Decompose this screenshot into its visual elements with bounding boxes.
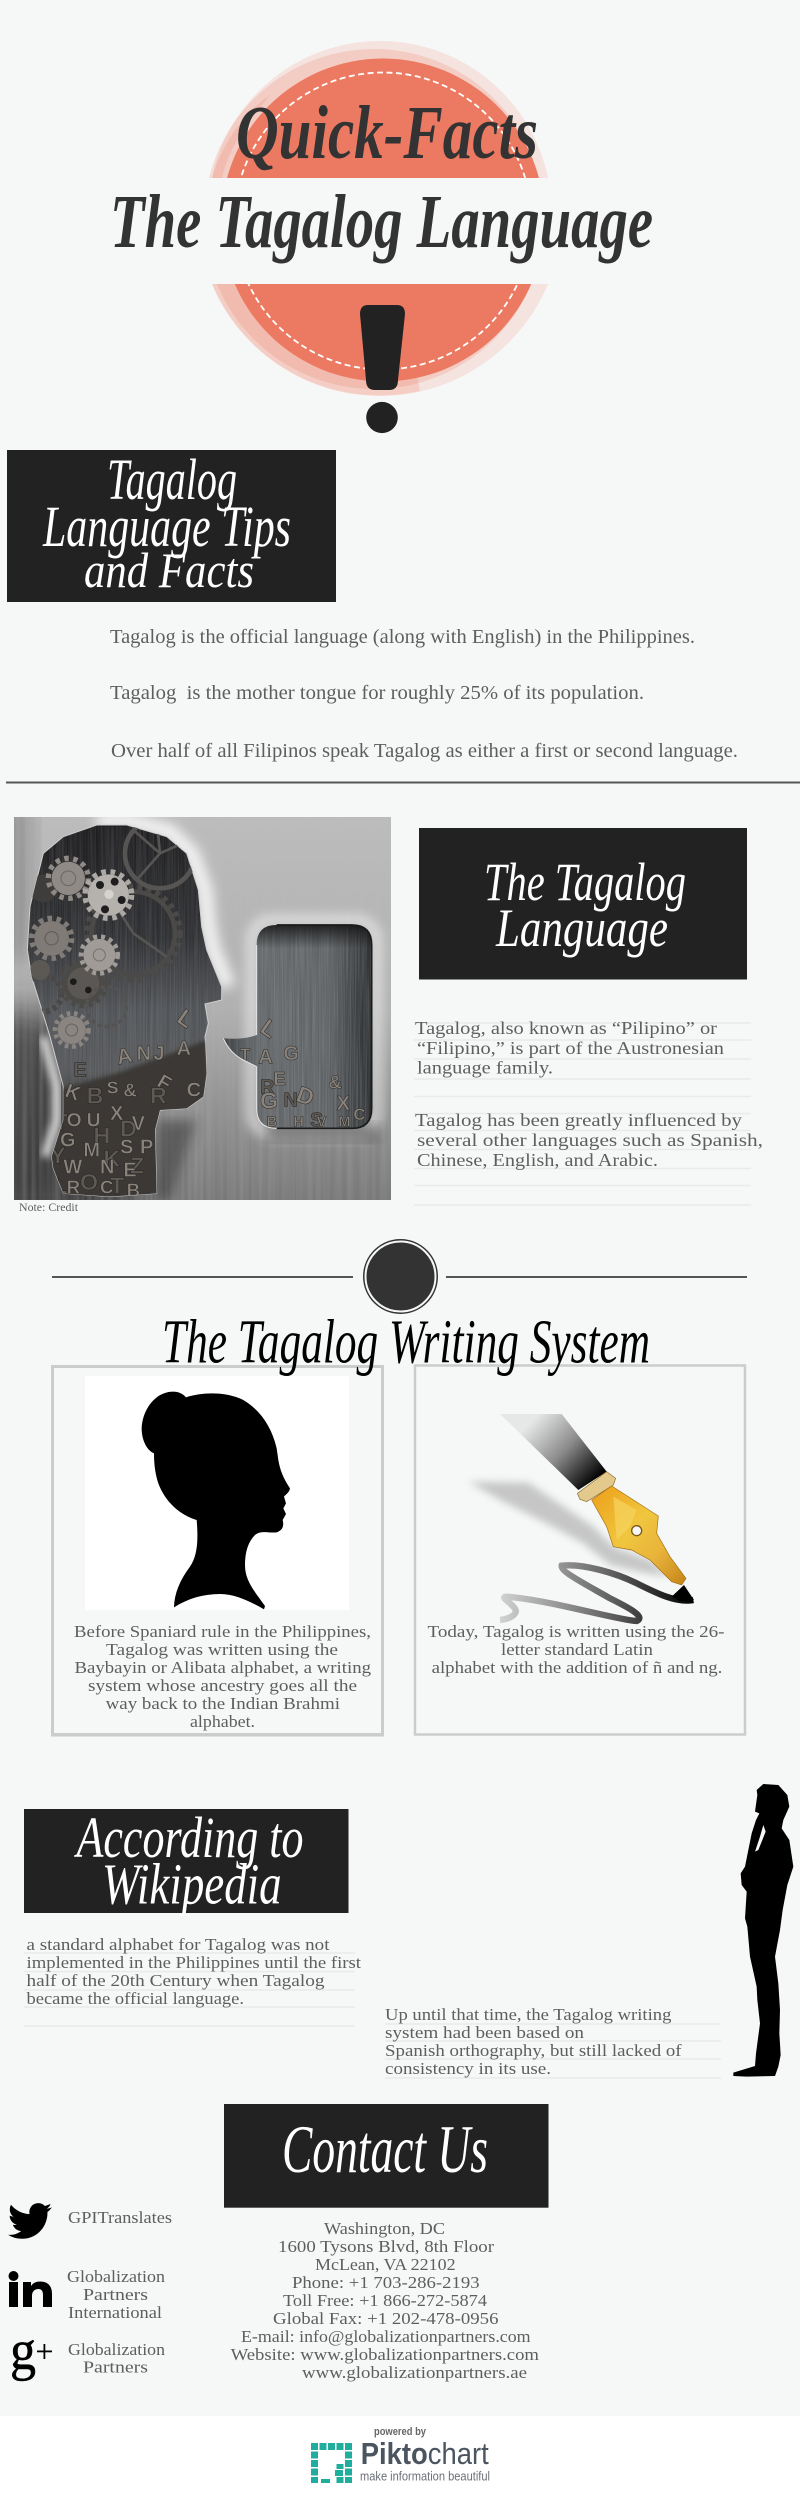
speech bubble: &: [328, 1071, 342, 1092]
gears and letters inside head: D: [120, 1116, 137, 1142]
speech bubble: T: [240, 1045, 250, 1064]
panel: According to Wikipedia heading: [24, 1805, 348, 1916]
gears and letters inside head: O: [80, 1169, 98, 1195]
text block: contact details: McLean, VA 22102: [315, 2255, 456, 2274]
icon: linkedin: [8, 2271, 52, 2307]
panel: Tagalog Language Tips and Facts heading: and Facts: [84, 542, 254, 598]
gears and letters inside head: Z: [130, 1152, 144, 1178]
panel: According to Wikipedia heading: Wikipedia: [102, 1851, 282, 1916]
speech bubble: L: [256, 1014, 283, 1043]
gears and letters inside head: E: [123, 1160, 137, 1182]
image: head with gears and speech bubble with letters: [14, 817, 391, 1200]
text: google plus name: [68, 2340, 165, 2377]
text block: contact details: www.globalizationpartners.ae: [302, 2363, 527, 2382]
text: before Spaniard rule: system whose ancestry goes all the: [88, 1676, 357, 1695]
text block: standard alphabet: became the official language.: [26, 1989, 244, 2008]
text block: standard alphabet: a standard alphabet for Tagalog was not: [26, 1935, 330, 1954]
text block: contact details: Global Fax: +1 202-478-0956: [273, 2309, 498, 2328]
text block: contact details: Toll Free: +1 866-272-5874: [283, 2291, 487, 2310]
text: google plus name: Partners: [83, 2358, 148, 2377]
panel: Contact Us heading: Contact Us: [282, 2111, 488, 2187]
gears and letters inside head: H: [93, 1122, 110, 1148]
gears and letters inside head: V: [132, 1113, 146, 1135]
speech bubble: N: [283, 1090, 298, 1112]
panel: Tagalog Language Tips and Facts heading: Tagalog: [107, 447, 237, 512]
speech bubble: [220, 923, 375, 1132]
speech bubble: D: [293, 1081, 318, 1111]
panel: The Tagalog Language heading: The Tagalog: [484, 852, 686, 912]
text: today Tagalog: Today, Tagalog is written using the 26-: [428, 1622, 724, 1641]
speech bubble: C: [353, 1105, 365, 1124]
header badge: coral circle with exclamation mark: [200, 41, 570, 433]
panel: Tagalog Language Tips and Facts heading: Language Tips: [42, 494, 291, 559]
footer: Piktochart branding: [0, 2416, 800, 2496]
gears and letters inside head: E: [73, 1060, 87, 1082]
text block: about Tagalog on ruled lines: [414, 1018, 763, 1205]
gears and letters inside head: S: [107, 1077, 119, 1097]
text: before Spaniard rule: Baybayin or Alibata alphabet, a writing: [74, 1658, 371, 1677]
icon: twitter: [8, 2203, 52, 2239]
gears and letters inside head: K: [103, 1146, 120, 1172]
text block: about Tagalog on ruled lines: several other languages such as Spanish,: [417, 1130, 763, 1150]
icon: exclamation mark: [360, 305, 405, 433]
image credit note: Note: Credit: [19, 1202, 79, 1214]
gears and letters inside head: J: [153, 1043, 164, 1065]
text block: Spanish orthography: system had been based on: [385, 2023, 584, 2042]
speech bubble: V: [317, 1115, 327, 1131]
text: before Spaniard rule: alphabet.: [190, 1712, 255, 1731]
gears and letters inside head: C: [100, 1176, 113, 1197]
gears and letters inside head: B: [127, 1180, 140, 1201]
divider with circle: [52, 1239, 747, 1314]
text block: contact details: E-mail: info@globalizationpartners.com: [241, 2327, 531, 2346]
text block: three quick facts: Over half of all Filipinos speak Tagalog as either a first or second language.: [111, 740, 738, 762]
text block: three quick facts: Tagalog is the official language (along with English) in the Philippines.: [110, 626, 695, 648]
speech bubble: H: [293, 1115, 304, 1131]
panel: card right: [415, 1366, 745, 1734]
text block: Spanish orthography: [385, 2005, 721, 2078]
speech bubble: S: [310, 1110, 323, 1132]
gears and letters inside head: X: [110, 1103, 124, 1125]
speech bubble: R: [260, 1076, 275, 1098]
gears and letters inside head: R: [67, 1176, 81, 1197]
gears and letters inside head: T: [110, 1172, 124, 1198]
image: man standing silhouette: [733, 1784, 793, 2077]
gears and letters inside head: &: [123, 1080, 137, 1101]
gears and letters inside head: W: [63, 1156, 82, 1178]
text block: about Tagalog on ruled lines: Tagalog has been greatly influenced by: [415, 1110, 742, 1130]
image: fountain pen: [468, 1414, 694, 1621]
text block: standard alphabet: half of the 20th Century when Tagalog: [26, 1971, 324, 1990]
text: before Spaniard rule: way back to the Indian Brahmi: [106, 1694, 340, 1713]
title: Quick-Facts: Quick-Facts: [236, 91, 538, 175]
speech bubble: A: [258, 1046, 273, 1068]
text block: contact details: [231, 2219, 539, 2382]
gears and letters inside head: L: [53, 1172, 68, 1198]
panel: The Tagalog Language heading: Language: [495, 898, 668, 958]
text block: about Tagalog on ruled lines: language family.: [417, 1058, 553, 1078]
gears and letters inside head: T: [53, 1109, 68, 1135]
gears and letters inside head: S: [120, 1136, 133, 1158]
gears and letters inside head: N: [137, 1043, 151, 1065]
text: today Tagalog: [428, 1622, 724, 1677]
gears and letters inside head: G: [60, 1130, 76, 1152]
gears and letters inside head: P: [140, 1136, 153, 1158]
gears and letters inside head: [23, 818, 223, 1201]
speech bubble: G: [283, 1043, 299, 1065]
icon: Piktochart logo: [311, 2443, 352, 2483]
speech bubble: B: [267, 1115, 277, 1131]
text block: contact details: Phone: +1 703-286-2193: [292, 2273, 480, 2292]
text block: Spanish orthography: Spanish orthography, but still lacked of: [385, 2041, 682, 2060]
text: google plus name: Globalization: [68, 2340, 165, 2359]
text: before Spaniard rule: Before Spaniard rule in the Philippines,: [74, 1622, 371, 1641]
text block: Spanish orthography: consistency in its use.: [385, 2059, 551, 2078]
text block: three quick facts: [110, 626, 738, 762]
panel: Tagalog Language Tips and Facts heading: [7, 447, 336, 602]
text: linkedin name: Partners: [83, 2285, 148, 2304]
text: linkedin name: Globalization: [67, 2267, 165, 2286]
icon: google plus: g: [10, 2320, 36, 2382]
text: linkedin name: [67, 2267, 165, 2322]
speech bubble: M: [338, 1115, 351, 1131]
text block: contact details: Website: www.globalizationpartners.com: [231, 2345, 539, 2364]
gears and letters inside head: U: [87, 1111, 101, 1132]
gears and letters inside head: Y: [50, 1142, 66, 1168]
text block: about Tagalog on ruled lines: “Filipino,” is part of the Austronesian: [417, 1038, 724, 1058]
footer: Piktochart branding: powered by: [374, 2426, 427, 2438]
text: today Tagalog: letter standard Latin: [501, 1640, 653, 1659]
gears and letters inside head: C: [187, 1080, 201, 1102]
gears and letters inside head: A: [114, 1043, 134, 1069]
text block: about Tagalog on ruled lines: Tagalog, also known as “Pilipino” or: [415, 1018, 717, 1038]
icon: google plus: [10, 2320, 52, 2382]
gears and letters inside head: K: [62, 1080, 84, 1106]
panel: card left: [51, 1366, 384, 1736]
speech bubble: G: [260, 1087, 278, 1113]
panel: Contact Us heading: [224, 2104, 548, 2208]
text block: contact details: 1600 Tysons Blvd, 8th Floor: [278, 2237, 495, 2256]
text: twitter handle: GPITranslates: [68, 2208, 172, 2227]
text block: Spanish orthography: Up until that time, the Tagalog writing: [385, 2005, 671, 2024]
text block: about Tagalog on ruled lines: Chinese, English, and Arabic.: [417, 1150, 658, 1170]
speech bubble: X: [337, 1093, 351, 1115]
gears and letters inside head: A: [177, 1038, 191, 1060]
gears and letters inside head: O: [67, 1111, 82, 1132]
gears and letters inside head: B: [87, 1082, 104, 1108]
text: linkedin name: International: [68, 2303, 162, 2322]
gears and letters inside head: F: [153, 1071, 175, 1096]
image: woman silhouette: [85, 1376, 349, 1610]
head silhouette: [27, 825, 222, 1197]
text: today Tagalog: alphabet with the addition of ñ and ng.: [432, 1658, 722, 1677]
text block: three quick facts: Tagalog is the mother tongue for roughly 25% of its population.: [110, 682, 644, 704]
text block: standard alphabet: [24, 1935, 361, 2026]
speech bubble: E: [273, 1068, 286, 1089]
gears and letters inside head: M: [83, 1140, 100, 1162]
panel: According to Wikipedia heading: According to: [73, 1805, 304, 1870]
panel: The Tagalog Language heading: [419, 828, 747, 980]
text: before Spaniard rule: Tagalog was written using the: [106, 1640, 338, 1659]
footer: Piktochart branding: Piktochart: [361, 2436, 489, 2471]
gears and letters inside head: N: [100, 1156, 114, 1178]
text block: contact details: Washington, DC: [324, 2219, 445, 2238]
gears and letters inside head: L: [173, 1004, 199, 1033]
text block: standard alphabet: implemented in the Philippines until the first: [26, 1953, 361, 1972]
text: before Spaniard rule: [74, 1622, 371, 1731]
footer: Piktochart branding: make information beautiful: [360, 2470, 490, 2484]
gears and letters inside head: R: [150, 1082, 167, 1108]
